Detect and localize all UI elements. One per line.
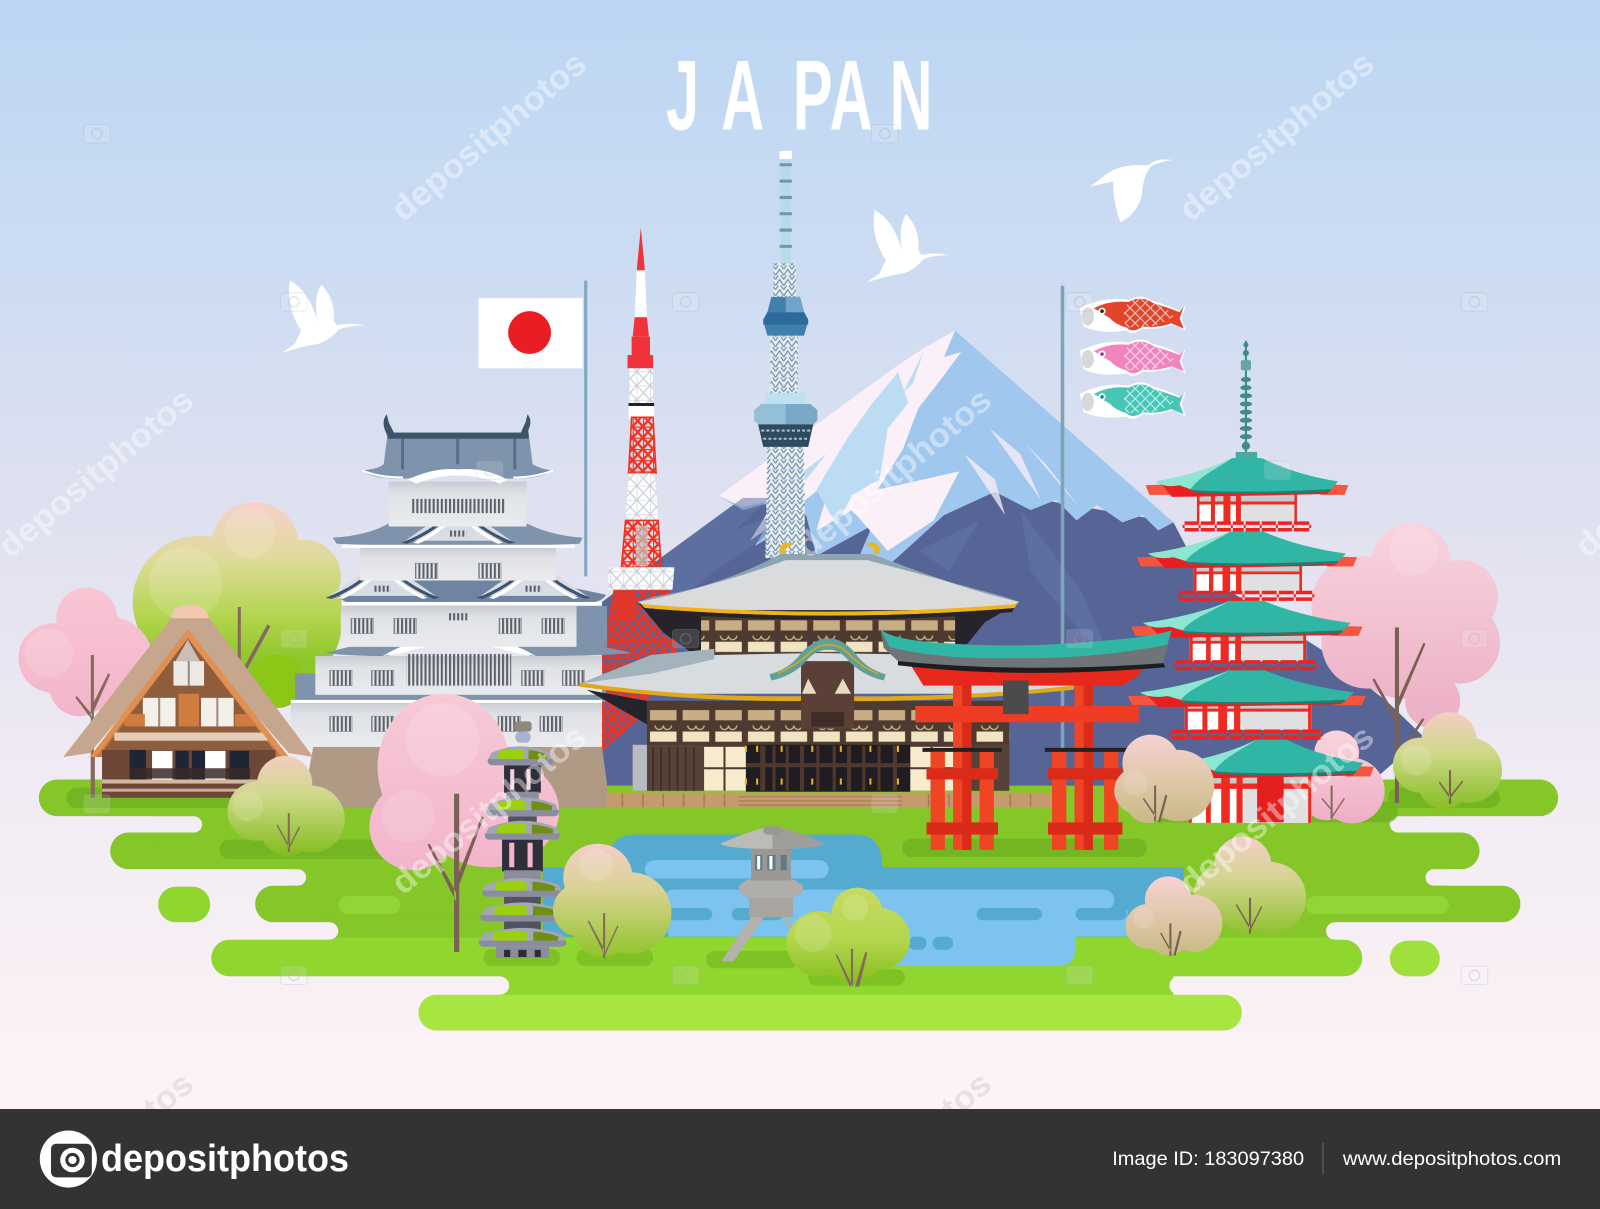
tree: large pink blossom, front: [369, 694, 559, 952]
title: J: [666, 41, 699, 151]
title: A: [721, 41, 764, 151]
pagoda spire: [1236, 341, 1257, 459]
temple hall Todai-ji: [580, 543, 1074, 808]
koi streamer: pink: [1080, 339, 1186, 376]
tree: green and pink blossom, left: [133, 502, 342, 708]
koi streamer: red: [1080, 297, 1186, 333]
watermark overlay: depositphotos: [790, 382, 999, 565]
footer logo icon: [40, 1130, 97, 1188]
Mount Fuji: [602, 331, 1423, 786]
Tokyo Tower: [602, 228, 677, 750]
watermark overlay: depositphotos: [1172, 45, 1381, 229]
gassho thatched house: [63, 605, 313, 798]
tree: pink blossom, far left: [18, 588, 154, 798]
watermark overlay: depositphotos: [385, 718, 594, 902]
pond: [543, 835, 1184, 966]
watermark overlay: depositphotos: [385, 45, 594, 229]
title: A: [830, 41, 872, 151]
footer logo wordmark: depositphotos: [101, 1137, 349, 1179]
footer bar: [0, 1109, 1600, 1209]
stone pagoda lantern: [479, 721, 566, 958]
torii gate: [881, 629, 1171, 850]
stone lantern in pond: [720, 826, 824, 961]
title: P: [793, 41, 832, 151]
bird: middle crane: [866, 210, 949, 283]
bush: tan, behind torii: [1114, 735, 1214, 823]
bush: green, by lantern: [553, 844, 671, 958]
footer image id: Image ID: 183097380: [1112, 1148, 1304, 1170]
bush: tan, right of pond: [1126, 876, 1222, 956]
koi flag pole: [1061, 286, 1064, 750]
bush: green, front centre: [787, 888, 910, 987]
watermark overlay: depositphotos: [1172, 718, 1381, 902]
footer site url: www.depositphotos.com: [1342, 1148, 1561, 1170]
bush: green, right of pond: [1194, 837, 1306, 934]
bush: green, right: [1393, 712, 1502, 809]
pagoda: Chureito five tiers: [1128, 341, 1374, 823]
Tokyo Skytree: [754, 151, 817, 558]
tree: pink blossom, right: [1311, 523, 1500, 803]
Japanese flag: [479, 281, 587, 576]
bird: left crane: [282, 281, 364, 353]
ground: layered green terraces: [0, 779, 1600, 1030]
title: N: [890, 41, 932, 151]
bush: pink behind pagoda: [1302, 731, 1385, 823]
koi streamer: teal: [1080, 382, 1186, 419]
watermark camera icons: [84, 124, 1488, 985]
bush: green, by house: [228, 756, 345, 856]
Himeji castle: [291, 414, 632, 808]
bird: right crane: [1090, 159, 1172, 222]
